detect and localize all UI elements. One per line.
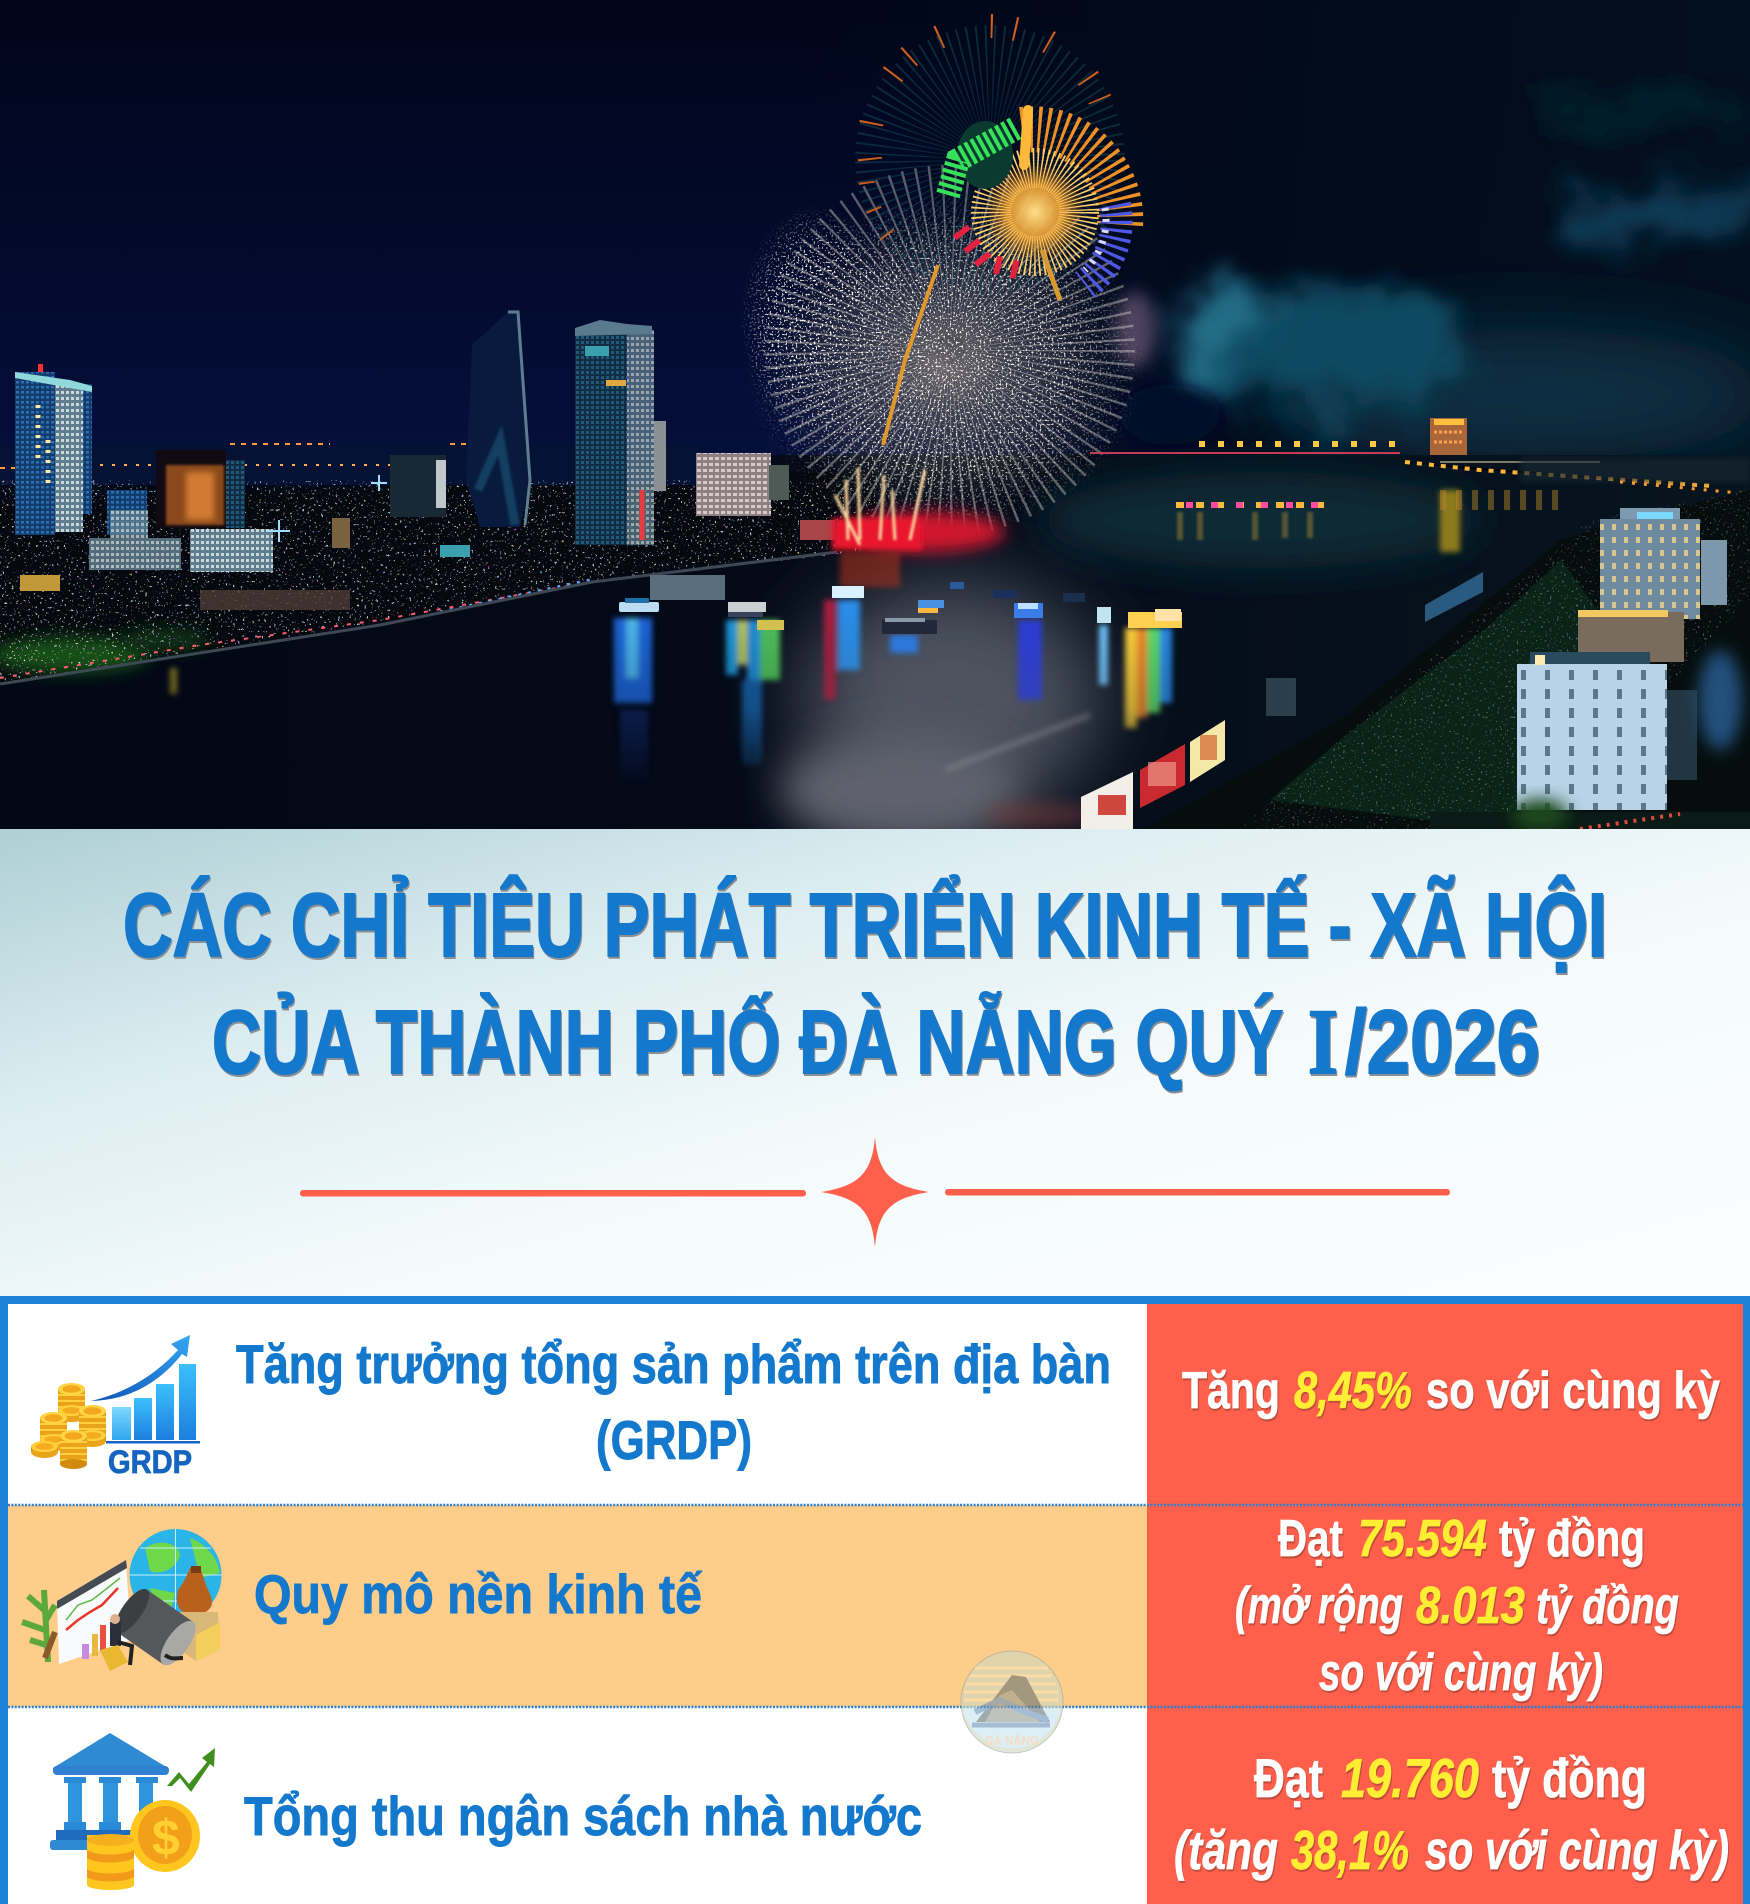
icon: state budget with bank building and coins	[50, 1733, 215, 1890]
icon: state budget with bank building and coins: $	[152, 1810, 180, 1866]
riverside billboards	[1081, 572, 1483, 829]
photo: Da Nang riverside fireworks at night	[0, 0, 1750, 845]
result: GRDP growth: 8,45%	[1294, 1362, 1412, 1420]
boats with lights	[619, 582, 1182, 634]
left bank buildings	[15, 312, 835, 610]
row label: GRDP growth	[236, 1333, 1111, 1471]
water of the Han River	[0, 455, 1750, 845]
row label: GRDP growth: (GRDP)	[596, 1409, 752, 1471]
white firework burst	[740, 195, 1145, 535]
left bank city	[0, 444, 875, 684]
result: GRDP growth	[1182, 1362, 1720, 1420]
right bank with trees, crowds and buildings	[1143, 490, 1750, 831]
result: state budget revenue: tỷ đồng	[1492, 1747, 1647, 1809]
result: economy scale	[1235, 1510, 1679, 1702]
icon: economy scale with globe, chart board and oil barrel	[22, 1529, 222, 1671]
decorative divider with four-point star	[300, 1137, 1450, 1247]
result: economy scale: Đạt	[1278, 1510, 1343, 1568]
shoreline lights	[0, 582, 590, 678]
upper firework bursts: teal, gold, blue, green and red	[866, 26, 1120, 445]
result: economy scale: (mở rộng	[1235, 1577, 1403, 1635]
far coloured lanterns and yellow reflections on the river	[1176, 490, 1560, 552]
watermark: Da Nang emblem: ĐÀ NẴNG	[985, 1733, 1039, 1748]
smoke and clouds on the right sky	[1115, 92, 1750, 460]
result: state budget revenue: 19.760	[1341, 1747, 1479, 1809]
result: state budget revenue: Đạt	[1254, 1747, 1323, 1809]
result: state budget revenue: 38,1%	[1291, 1819, 1409, 1881]
result: economy scale: tỷ đồng	[1536, 1577, 1679, 1635]
far bridge and lights on the horizon	[1090, 418, 1750, 494]
result: economy scale: 75.594	[1358, 1510, 1487, 1568]
red glow and fountains at the launch barge	[832, 468, 1005, 587]
title panel background	[0, 829, 1750, 1296]
result: state budget revenue: (tăng	[1174, 1819, 1278, 1881]
title: CỦA THÀNH PHỐ ĐÀ NẴNG QUÝ	[212, 991, 1283, 1093]
row label: state budget revenue: Tổng thu ngân sách nhà nước	[244, 1785, 922, 1847]
result: state budget revenue	[1174, 1747, 1729, 1881]
title: I	[1308, 991, 1338, 1094]
result: economy scale: so với cùng kỳ)	[1319, 1644, 1603, 1702]
result: economy scale: 8.013	[1416, 1577, 1525, 1635]
result: economy scale: tỷ đồng	[1499, 1510, 1645, 1568]
icon: GRDP growth chart with coins	[31, 1335, 200, 1480]
row label: economy scale: Quy mô nền kinh tế	[254, 1563, 702, 1625]
table frame and rows	[0, 1296, 1750, 1904]
icon: GRDP growth chart with coins: GRDP	[108, 1444, 192, 1480]
row label: GRDP growth: Tăng trưởng tổng sản phẩm trên địa bàn	[236, 1333, 1111, 1395]
title: /2026	[1345, 993, 1540, 1093]
watermark: Da Nang emblem	[961, 1651, 1063, 1753]
result: GRDP growth: Tăng	[1182, 1362, 1280, 1420]
reflections of the boats	[170, 600, 1172, 780]
title	[123, 874, 1607, 1094]
